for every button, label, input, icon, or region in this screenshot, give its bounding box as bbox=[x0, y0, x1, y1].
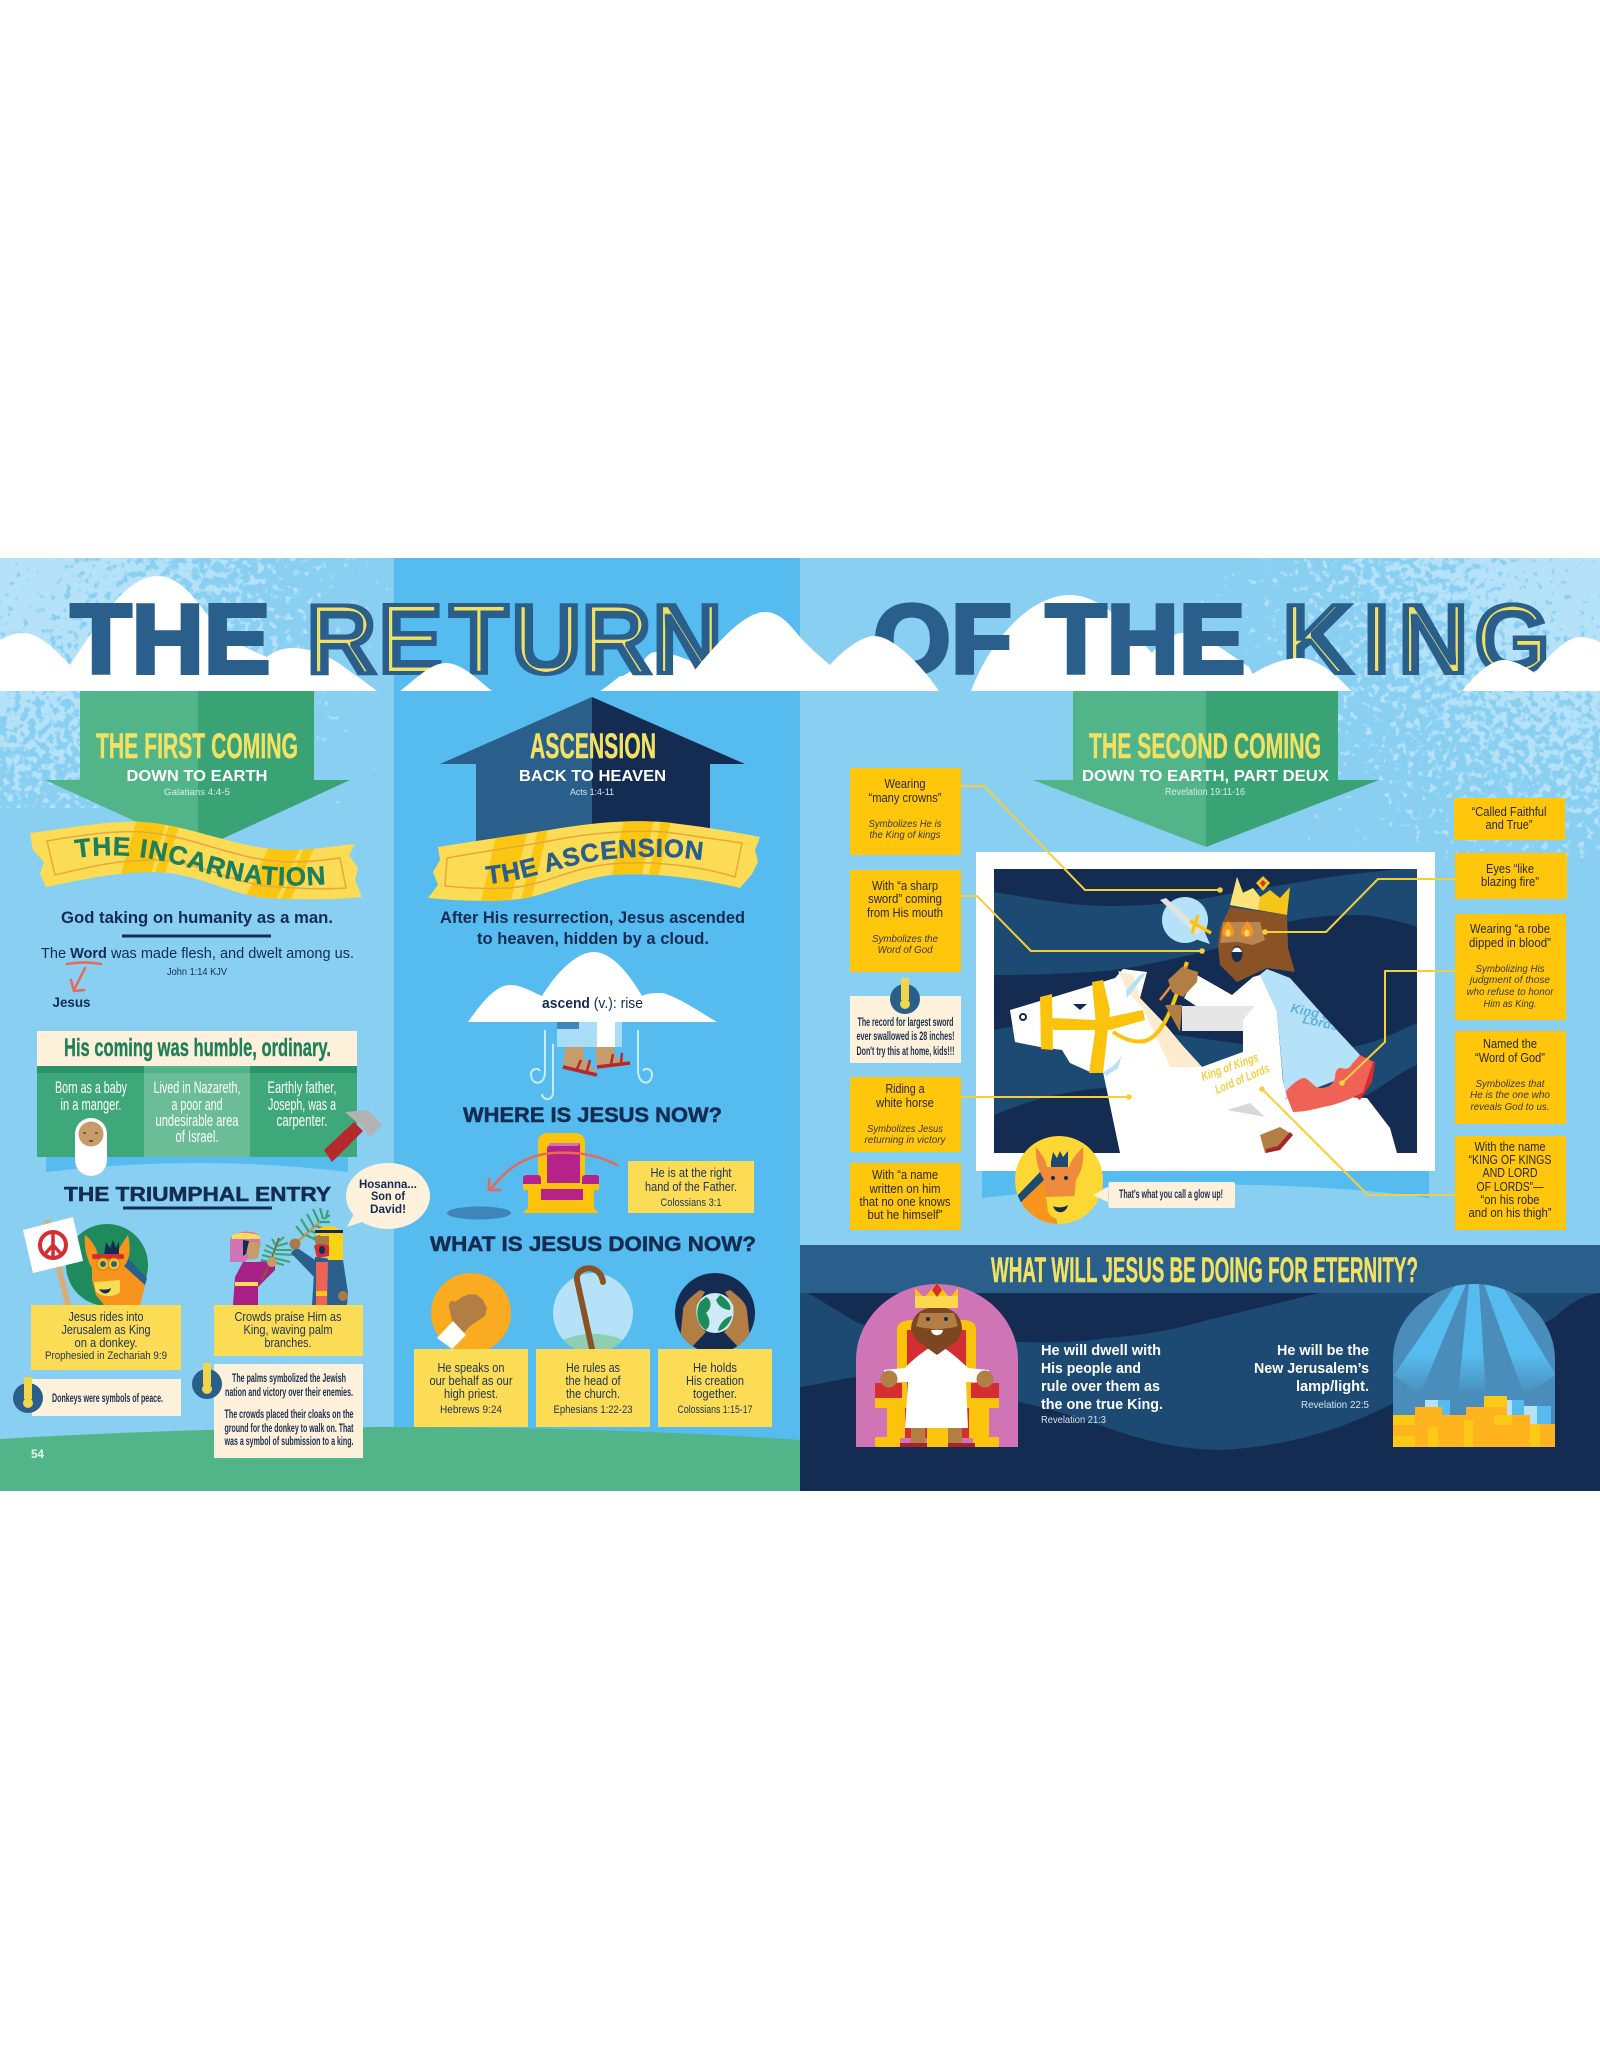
navy background with wave bbox=[800, 1293, 1600, 1491]
callout: robe dipped in blood bbox=[1455, 914, 1566, 1020]
caption: high priest bbox=[414, 1349, 528, 1427]
cloud with definition bbox=[468, 952, 717, 1022]
callout: faithful and true: and True” bbox=[1486, 818, 1532, 832]
caption: Jesus rides into Jerusalem: Prophesied in Zechariah 9:9 bbox=[45, 1350, 167, 1362]
callout: king of kings: With the name bbox=[1474, 1140, 1546, 1154]
fact: largest sword: Don't try this at home, kids!!! bbox=[856, 1044, 954, 1058]
speech bubble: glow up: That's what you call a glow up! bbox=[1119, 1187, 1223, 1201]
illustration: King Jesus on throne bbox=[856, 1283, 1018, 1447]
heading: ascension: ASCENSION bbox=[530, 727, 656, 766]
panel: triumphal entry bbox=[13, 1163, 430, 1461]
caption: head of the church bbox=[536, 1349, 650, 1427]
icon: donkey with peace sign bbox=[23, 1217, 148, 1306]
title bbox=[70, 584, 1550, 694]
caption: head of the church: the church. bbox=[566, 1387, 620, 1401]
fact: donkeys were symbols of peace bbox=[13, 1377, 181, 1416]
caption: right hand of the Father: hand of the Father. bbox=[645, 1180, 737, 1194]
panel: ascension bbox=[428, 697, 760, 1100]
caption: head of the church: Ephesians 1:22-23 bbox=[554, 1404, 632, 1416]
callout: word of God bbox=[1455, 1031, 1566, 1124]
callout: name written bbox=[850, 1163, 961, 1230]
fact: palms symbolized: The palms symbolized the Jewish bbox=[232, 1371, 346, 1385]
column: earthly father: Earthly father, bbox=[268, 1078, 336, 1097]
caption: high priest: Hebrews 9:24 bbox=[440, 1404, 502, 1416]
arrow: down to earth bbox=[45, 691, 350, 850]
title: KING bbox=[1282, 584, 1550, 694]
subheading: back to heaven: BACK TO HEAVEN bbox=[519, 768, 666, 785]
illustration: New Jerusalem bbox=[1393, 1284, 1556, 1447]
callout: king of kings bbox=[1455, 1136, 1566, 1230]
banner: the ascension bbox=[428, 821, 760, 901]
callout: word of God: He is the one who bbox=[1470, 1089, 1550, 1101]
fact: palms symbolized: ground for the donkey to walk on. That bbox=[224, 1421, 354, 1435]
arrow: right hand bbox=[489, 1153, 617, 1190]
callout: word of God: “Word of God” bbox=[1475, 1051, 1545, 1065]
arrow: word to Jesus bbox=[67, 962, 101, 991]
illustration: Jesus on white horse: King of Kings bbox=[1199, 1050, 1260, 1084]
column: born as a baby: in a manger. bbox=[60, 1095, 122, 1114]
text: he will dwell: His people and bbox=[1041, 1360, 1141, 1377]
caption: high priest: high priest. bbox=[444, 1387, 498, 1401]
illustration: Jesus on white horse: Lord of Lords bbox=[1213, 1061, 1272, 1097]
icon: praying hand bbox=[431, 1273, 511, 1353]
text: he will dwell: Revelation 21:3 bbox=[1041, 1414, 1106, 1426]
callout: name written: but he himself” bbox=[868, 1208, 942, 1222]
callout: robe dipped in blood: judgment of those bbox=[1468, 974, 1550, 986]
icon: carpenter axe bbox=[324, 1110, 382, 1162]
callout: name written: written on him bbox=[869, 1182, 940, 1196]
banner: the incarnation bbox=[30, 822, 362, 900]
callout: robe dipped in blood: dipped in blood” bbox=[1469, 936, 1551, 950]
caption: holds creation together bbox=[658, 1349, 772, 1427]
callout: white horse: Symbolizes Jesus bbox=[867, 1123, 944, 1135]
callout: king of kings: and on his thigh” bbox=[1468, 1206, 1552, 1220]
title: KING bbox=[1282, 584, 1550, 694]
text: he will dwell: He will dwell with bbox=[1041, 1342, 1161, 1359]
fact: largest sword: The record for largest sword bbox=[858, 1015, 954, 1029]
head bbox=[1218, 907, 1295, 982]
title: RETURN bbox=[306, 584, 723, 694]
callout: sharp sword: With “a sharp bbox=[872, 879, 938, 893]
callout: white horse bbox=[850, 1077, 961, 1152]
fact: palms symbolized: nation and victory over their enemies. bbox=[225, 1385, 353, 1399]
crown bbox=[1230, 877, 1290, 915]
green hill ground bbox=[0, 1427, 800, 1491]
hands bbox=[1168, 967, 1198, 997]
panel: second coming bbox=[850, 691, 1567, 1230]
illustration: Jesus on white horse: King of bbox=[1289, 1000, 1338, 1025]
column: lived in Nazareth: undesirable area bbox=[156, 1111, 239, 1130]
callout: many crowns bbox=[850, 768, 961, 855]
panel: left column background bbox=[0, 558, 394, 1491]
heading: where is Jesus now: WHERE IS JESUS NOW? bbox=[463, 1104, 722, 1127]
text: he will dwell: the one true King. bbox=[1041, 1396, 1163, 1413]
picture frame bbox=[976, 852, 1435, 1171]
callout: king of kings: “KING OF KINGS bbox=[1468, 1153, 1552, 1167]
callout: name written: that no one knows bbox=[860, 1195, 950, 1209]
caption: crowds praise Him: Crowds praise Him as bbox=[234, 1310, 342, 1324]
callout: sharp sword bbox=[850, 870, 961, 972]
column: born as a baby bbox=[37, 1066, 144, 1157]
text: he will dwell bbox=[1041, 1342, 1163, 1426]
banner: the incarnation: THE INCARNATION bbox=[74, 837, 324, 886]
panel: eternity bbox=[800, 1245, 1600, 1491]
callout: white horse: returning in victory bbox=[864, 1134, 946, 1146]
icon: small donkey bbox=[1015, 1135, 1103, 1228]
shadow swoosh bbox=[46, 1157, 348, 1172]
column: lived in Nazareth: a poor and bbox=[172, 1095, 222, 1114]
column: earthly father: carpenter. bbox=[276, 1111, 328, 1130]
heading bar: his coming was humble bbox=[37, 1031, 357, 1066]
callout: sharp sword: Word of God bbox=[878, 944, 934, 956]
callout: word of God: reveals God to us. bbox=[1470, 1101, 1550, 1113]
callout: word of God: Symbolizes that bbox=[1476, 1078, 1545, 1090]
caption: head of the church: He rules as bbox=[566, 1361, 620, 1375]
panel: what is Jesus doing now bbox=[414, 1233, 772, 1427]
callout: sharp sword: from His mouth bbox=[867, 906, 943, 920]
panel: first coming bbox=[30, 691, 362, 1010]
arrow: down to earth part deux bbox=[1033, 691, 1379, 847]
caption: right hand of the Father: He is at the right bbox=[650, 1166, 732, 1180]
text: he will be the lamp: He will be the bbox=[1277, 1342, 1369, 1359]
caption: holds creation together: Colossians 1:15-17 bbox=[678, 1404, 752, 1416]
panel: humble coming bbox=[37, 1031, 382, 1176]
infographic spread bbox=[0, 558, 1600, 1491]
reference: Galatians: Galatians 4:4-5 bbox=[164, 787, 230, 798]
title: RETURN bbox=[306, 584, 723, 694]
column: lived in Nazareth: of Israel. bbox=[176, 1127, 218, 1146]
text: he will be the lamp: lamp/light. bbox=[1296, 1378, 1369, 1395]
callout: blazing fire: Eyes “like bbox=[1486, 862, 1534, 876]
icon: hands holding globe bbox=[675, 1273, 755, 1349]
caption: holds creation together: He holds bbox=[693, 1361, 737, 1375]
caption: high priest: He speaks on bbox=[438, 1361, 505, 1375]
title: OF bbox=[873, 584, 1012, 694]
callout: king of kings: AND LORD bbox=[1482, 1166, 1538, 1180]
text: after his resurrection: to heaven, hidden by a cloud. bbox=[477, 930, 709, 948]
text: after his resurrection bbox=[440, 909, 745, 948]
caption: crowds praise Him: King, waving palm bbox=[244, 1323, 332, 1337]
icon: baby in swaddle bbox=[75, 1118, 107, 1176]
swoosh below frame bbox=[982, 1171, 1429, 1198]
speech bubble: glow up bbox=[1093, 1182, 1235, 1208]
speech bubble: Hosanna: Hosanna... bbox=[359, 1179, 417, 1191]
reference: Acts: Acts 1:4-11 bbox=[570, 787, 614, 798]
column: earthly father bbox=[250, 1066, 357, 1157]
heading: the triumphal entry: THE TRIUMPHAL ENTRY bbox=[64, 1184, 332, 1206]
illustration: Jesus on white horse bbox=[994, 868, 1417, 1153]
icon: crowds waving palms bbox=[230, 1208, 348, 1305]
icon: Jesus feet below cloud bbox=[531, 1020, 652, 1099]
fact: palms symbolized: was a symbol of submission to a king. bbox=[224, 1434, 354, 1448]
subheading: part deux: DOWN TO EARTH, PART DEUX bbox=[1082, 768, 1330, 785]
caption: crowds praise Him bbox=[214, 1305, 363, 1356]
caption: right hand of the Father: Colossians 3:1 bbox=[660, 1197, 722, 1209]
column: lived in Nazareth: Lived in Nazareth, bbox=[154, 1078, 240, 1097]
verse: John 1:14: The Word was made flesh, and dwelt among us. bbox=[41, 945, 354, 962]
speech bubble: Hosanna bbox=[346, 1163, 430, 1229]
page number: 54 bbox=[31, 1449, 45, 1461]
text: God taking on humanity: God taking on humanity as a man. bbox=[61, 909, 333, 927]
column: lived in Nazareth bbox=[144, 1066, 250, 1157]
callout: robe dipped in blood: Him as King. bbox=[1484, 998, 1536, 1010]
heading: the first coming: THE FIRST COMING bbox=[96, 727, 298, 766]
icon: shadow bbox=[447, 1206, 511, 1220]
text: after his resurrection: After His resurrection, Jesus ascended bbox=[440, 909, 745, 927]
title: THE bbox=[1046, 584, 1246, 694]
caption: Jesus rides into Jerusalem: on a donkey. bbox=[74, 1336, 138, 1350]
caption: high priest: our behalf as our bbox=[430, 1374, 512, 1388]
callout: robe dipped in blood: Wearing “a robe bbox=[1470, 922, 1550, 936]
heading: what is Jesus doing now: WHAT IS JESUS DOING NOW? bbox=[430, 1233, 756, 1256]
callout: king of kings: OF LORDS”— bbox=[1476, 1180, 1544, 1194]
panel: center column background bbox=[394, 558, 800, 1491]
subheading: down to earth: DOWN TO EARTH bbox=[126, 768, 268, 785]
speech bubble: Hosanna: David! bbox=[370, 1204, 406, 1216]
fact: palms symbolized bbox=[192, 1363, 363, 1458]
text: he will be the lamp: New Jerusalem’s bbox=[1254, 1360, 1369, 1377]
speech bubble: Hosanna: Son of bbox=[371, 1191, 405, 1203]
callout: sharp sword: Symbolizes the bbox=[872, 933, 938, 945]
fact: largest sword: ever swallowed is 28 inches! bbox=[856, 1029, 954, 1043]
caption: right hand of the Father bbox=[628, 1161, 754, 1213]
illustration: Jesus on white horse: Lords bbox=[1301, 1011, 1340, 1033]
callout: name written: With “a name bbox=[872, 1168, 938, 1182]
clouds behind title bbox=[0, 576, 1262, 691]
panel: right page background bbox=[800, 558, 1600, 1491]
fact: largest sword bbox=[850, 978, 961, 1063]
horse bbox=[1010, 969, 1397, 1153]
heading: the second coming: THE SECOND COMING bbox=[1089, 727, 1321, 766]
caption: head of the church: the head of bbox=[566, 1374, 621, 1388]
caption: Jesus rides into Jerusalem bbox=[31, 1305, 181, 1370]
banner: the ascension: THE ASCENSION bbox=[484, 838, 703, 884]
callout: robe dipped in blood: Symbolizing His bbox=[1476, 963, 1545, 975]
callout: blazing fire: blazing fire” bbox=[1481, 875, 1539, 889]
callout: robe dipped in blood: who refuse to honor bbox=[1466, 986, 1554, 998]
caption: Jesus rides into Jerusalem: Jerusalem as King bbox=[62, 1323, 151, 1337]
callout: many crowns: the King of kings bbox=[870, 829, 941, 841]
reference: Revelation: Revelation 19:11-16 bbox=[1165, 787, 1245, 798]
callout: many crowns: “many crowns” bbox=[868, 791, 942, 805]
callout lines bbox=[961, 786, 1455, 1195]
reference: John: John 1:14 KJV bbox=[167, 967, 227, 978]
cape bbox=[1257, 969, 1360, 1100]
arrow: back to heaven bbox=[440, 697, 745, 858]
callout: blazing fire bbox=[1455, 853, 1567, 899]
panel: where is Jesus now bbox=[447, 1104, 754, 1220]
caption: crowds praise Him: branches. bbox=[264, 1336, 312, 1350]
heading bar: his coming was humble: His coming was humble, ordinary. bbox=[64, 1034, 331, 1062]
bridle bbox=[1040, 980, 1145, 1073]
fact: donkeys were symbols of peace: Donkeys were symbols of peace. bbox=[52, 1391, 163, 1405]
callout: word of God: Named the bbox=[1483, 1037, 1537, 1051]
robe bbox=[1182, 975, 1287, 1100]
foot bbox=[1260, 1127, 1293, 1153]
title: THE bbox=[70, 584, 270, 694]
callout: many crowns: Symbolizes He is bbox=[868, 818, 942, 830]
icon: shepherd staff bbox=[553, 1265, 633, 1349]
caption: holds creation together: together. bbox=[693, 1387, 737, 1401]
callout: white horse: Riding a bbox=[886, 1082, 925, 1096]
callout: faithful and true: “Called Faithful bbox=[1472, 805, 1546, 819]
clouds in front of title bbox=[0, 612, 1600, 691]
column: earthly father: Joseph, was a bbox=[268, 1095, 336, 1114]
band background bbox=[800, 1245, 1600, 1293]
callout: faithful and true bbox=[1454, 798, 1565, 840]
fact: palms symbolized: The crowds placed their cloaks on the bbox=[224, 1407, 354, 1421]
callout: many crowns: Wearing bbox=[884, 777, 926, 791]
caption: holds creation together: His creation bbox=[686, 1374, 744, 1388]
callout: white horse: white horse bbox=[875, 1096, 934, 1110]
text: he will be the lamp bbox=[1254, 1342, 1369, 1411]
icon: throne bbox=[523, 1133, 599, 1213]
caption: Jesus rides into Jerusalem: Jesus rides into bbox=[68, 1310, 144, 1324]
text: he will dwell: rule over them as bbox=[1041, 1378, 1160, 1395]
column: born as a baby: Born as a baby bbox=[55, 1078, 127, 1097]
callout: sharp sword: sword” coming bbox=[868, 892, 942, 906]
sword bubble bbox=[1162, 897, 1208, 943]
label: Jesus: Jesus bbox=[52, 994, 91, 1010]
cloud with definition: ascend (v.): rise bbox=[542, 996, 643, 1012]
text: he will be the lamp: Revelation 22:5 bbox=[1301, 1399, 1369, 1411]
callout: king of kings: “on his robe bbox=[1480, 1193, 1540, 1207]
